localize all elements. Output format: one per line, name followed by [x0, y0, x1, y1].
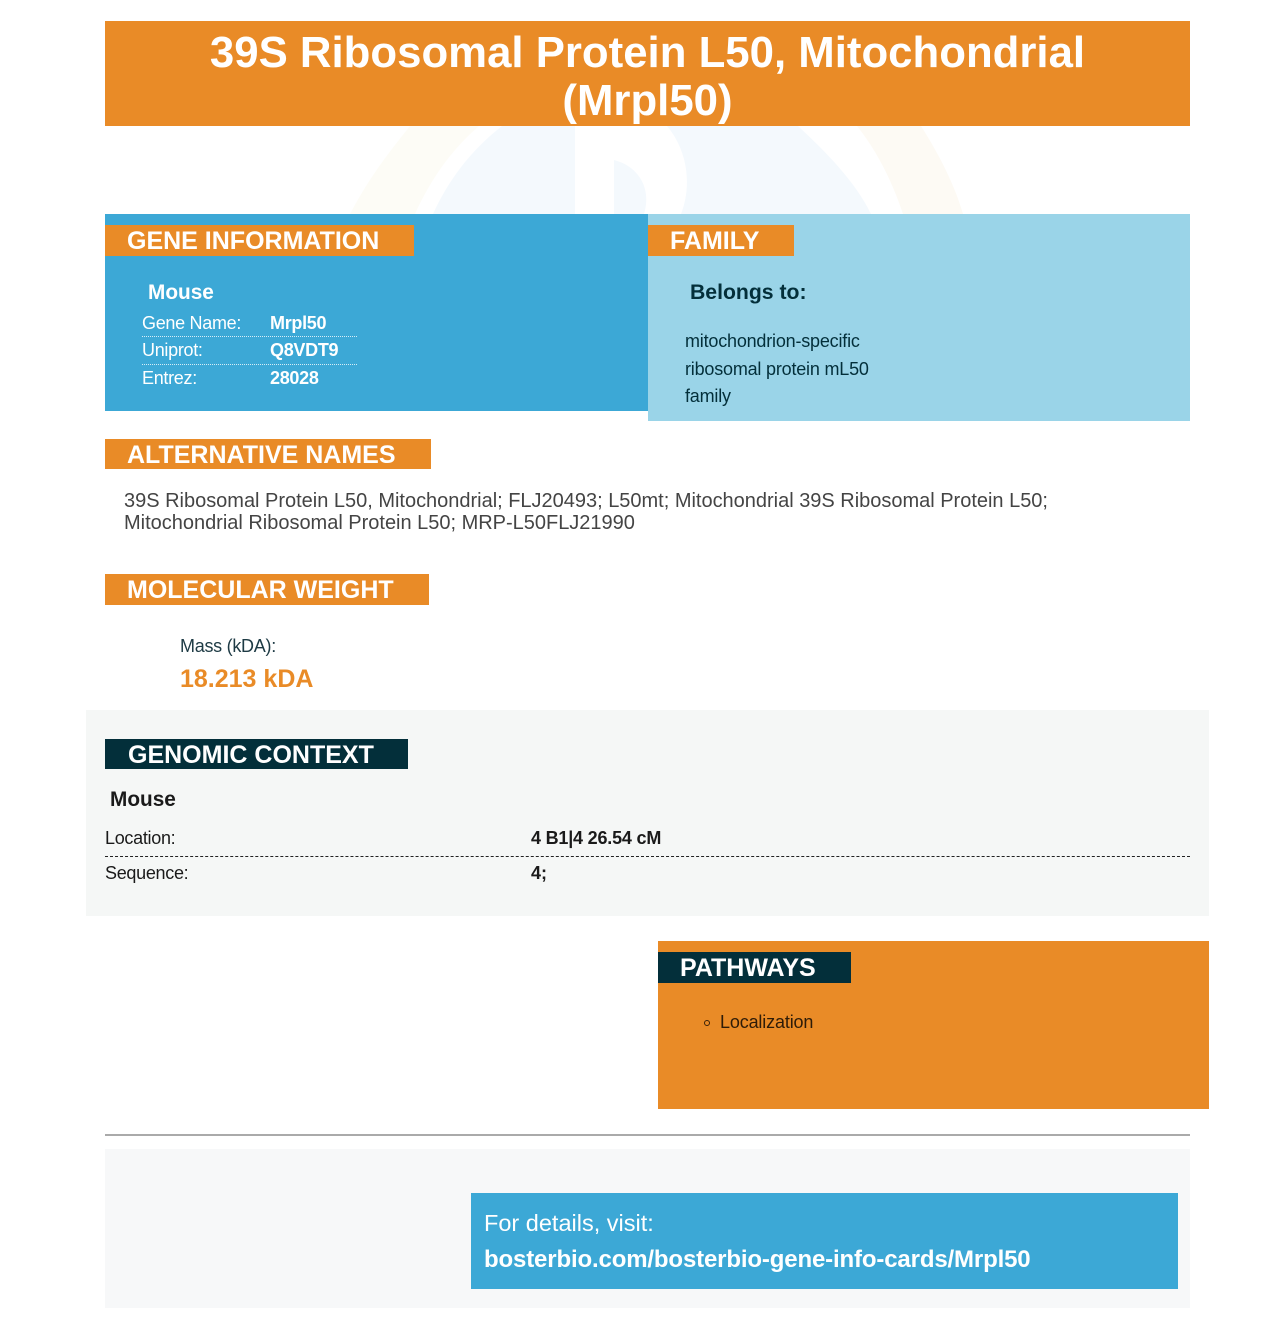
heading: molecular weight: MOLECULAR WEIGHT: [127, 576, 394, 604]
alternative names text: 39S Ribosomal Protein L50, Mitochondrial; FLJ20493; L50mt; Mitochondrial 39S Ribosomal Protein L50;: [124, 490, 1048, 512]
heading: genomic context: GENOMIC CONTEXT: [128, 741, 374, 769]
alternative names text: Mitochondrial Ribosomal Protein L50; MRP-L50FLJ21990: [124, 512, 635, 534]
location row: Location:: [105, 828, 175, 848]
family description: [685, 331, 869, 406]
panel: family: [648, 214, 1190, 421]
heading: pathways: [658, 952, 851, 983]
uniprot row: Uniprot:: [142, 340, 203, 360]
panel: footer: [105, 1149, 1190, 1308]
title banner: 39S Ribosomal Protein L50, Mitochondrial: [210, 28, 1085, 76]
callout: details link: [471, 1193, 1178, 1289]
mass value: 18.213 kDA: [180, 665, 313, 693]
heading: family: [648, 225, 794, 256]
species label: Mouse: [148, 281, 214, 304]
pathway item: Localization: [720, 1012, 813, 1032]
title banner: (Mrpl50): [562, 76, 733, 124]
entrez row: 28028: [270, 368, 319, 388]
callout url: bosterbio.com/bosterbio-gene-info-cards/Mrpl50: [484, 1246, 1030, 1273]
family description: ribosomal protein mL50: [685, 358, 869, 378]
gene name row: Mrpl50: [270, 313, 326, 333]
location row: 4 B1|4 26.54 cM: [531, 828, 661, 848]
title banner: [105, 21, 1190, 126]
watermark logo: [350, 126, 963, 214]
heading: alternative names: ALTERNATIVE NAMES: [127, 441, 396, 469]
divider: [105, 1134, 1190, 1136]
callout label: For details, visit:: [484, 1210, 654, 1236]
gene name row: Gene Name:: [142, 313, 241, 333]
species label: Mouse: [110, 788, 176, 811]
sequence row: Sequence:: [105, 863, 188, 883]
location row: [105, 822, 1190, 857]
heading: family: FAMILY: [670, 227, 759, 255]
bullet icon: [704, 1020, 710, 1026]
mass label: Mass (kDA):: [180, 636, 276, 656]
uniprot row: Q8VDT9: [270, 340, 338, 360]
family description: mitochondrion-specific: [685, 331, 860, 351]
uniprot row: [142, 337, 357, 365]
panel: genomic context: [86, 710, 1209, 916]
sequence row: 4;: [531, 863, 547, 883]
panel: gene information: [105, 214, 648, 411]
alternative names text: [124, 490, 1048, 534]
entrez row: [142, 368, 319, 388]
heading: pathways: PATHWAYS: [680, 954, 816, 982]
heading: gene information: GENE INFORMATION: [127, 227, 379, 255]
belongs to label: Belongs to:: [690, 281, 807, 304]
sequence row: [105, 863, 547, 883]
panel: pathways: [658, 941, 1209, 1109]
entrez row: Entrez:: [142, 368, 197, 388]
family description: family: [685, 386, 731, 406]
gene name row: [142, 309, 357, 337]
